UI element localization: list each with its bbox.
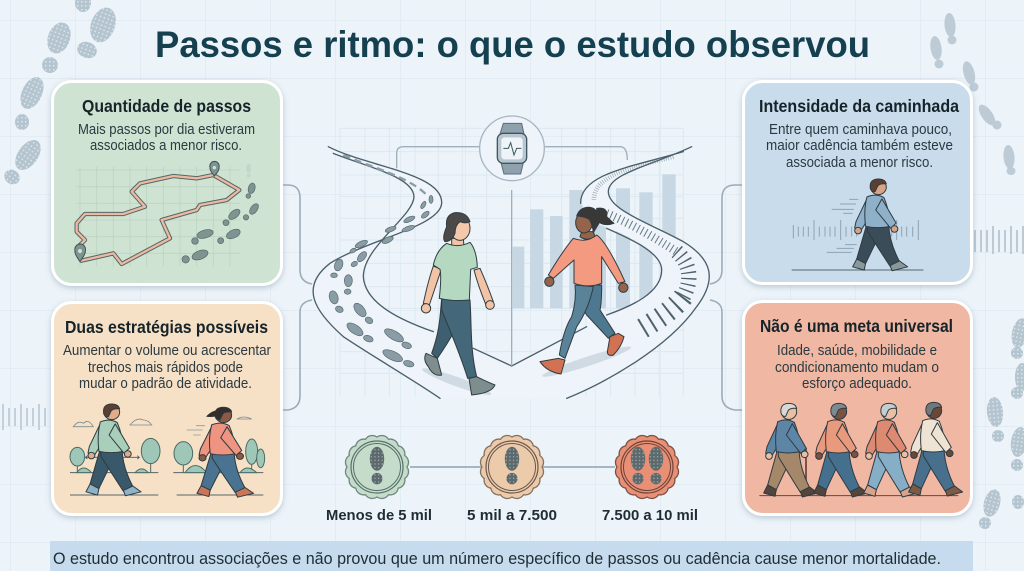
arrows xyxy=(85,456,139,459)
clouds xyxy=(73,417,252,427)
description xyxy=(766,121,953,171)
description: associados a menor risco. xyxy=(90,137,242,154)
heading: Duas estratégias possíveis xyxy=(65,317,268,337)
description xyxy=(63,342,271,392)
decorative ruler left xyxy=(3,404,45,430)
decorative footprints top right xyxy=(929,13,1016,175)
central illustration xyxy=(313,116,709,399)
decorative footprints lower right xyxy=(979,317,1024,529)
bottom disclaimer bar xyxy=(50,541,973,571)
description: maior cadência também esteve xyxy=(766,137,953,154)
footprints on road xyxy=(328,195,433,368)
cadence ticks xyxy=(594,157,689,330)
description xyxy=(775,342,939,392)
decorative footprints top left xyxy=(1,0,120,187)
walker 1 xyxy=(764,403,818,497)
heading: Quantidade de passos xyxy=(82,96,251,116)
side connectors xyxy=(282,185,742,410)
walker 2 xyxy=(814,403,868,497)
left road dashes xyxy=(343,155,428,197)
ground xyxy=(759,494,958,497)
medal connector line xyxy=(410,466,615,468)
panel: quantidade de passos xyxy=(52,82,282,284)
description: Aumentar o volume ou acrescentar xyxy=(63,342,271,359)
ground xyxy=(792,268,923,272)
medal: 7.500 a 10 mil xyxy=(615,435,679,499)
trees xyxy=(70,438,265,473)
description: trechos mais rápidos pode xyxy=(88,359,243,376)
heading: Não é uma meta universal xyxy=(760,316,953,336)
man xyxy=(86,404,141,496)
bottom disclaimer bar: O estudo encontrou associações e não provou que um número específico de passos ou cadência cause menor mortalidade. xyxy=(53,549,941,568)
description xyxy=(78,121,255,154)
walker 4 xyxy=(909,402,963,496)
panel: duas estratégias possíveis xyxy=(52,302,282,514)
watch icon xyxy=(480,116,544,181)
woman in green walking xyxy=(421,213,495,399)
motion lines xyxy=(187,426,205,435)
description: esforço adequado. xyxy=(802,375,912,392)
central divider xyxy=(510,190,514,366)
ponytail xyxy=(206,410,221,417)
description: mudar o padrão de atividade. xyxy=(79,375,252,392)
heading: Intensidade da caminhada xyxy=(759,96,959,116)
description: condicionamento mudam o xyxy=(775,359,939,376)
cane xyxy=(801,449,806,494)
medal labels: 5 mil a 7.500 xyxy=(467,507,557,524)
description: Idade, saúde, mobilidade e xyxy=(777,342,937,359)
walker 3 xyxy=(864,403,918,497)
central grid xyxy=(340,128,683,397)
four older walkers xyxy=(759,402,963,497)
medal labels: Menos de 5 mil xyxy=(326,507,432,524)
description: Entre quem caminhava pouco, xyxy=(769,121,952,138)
decorative ruler right xyxy=(975,226,1023,254)
medal labels: 7.500 a 10 mil xyxy=(602,507,698,524)
road edges xyxy=(313,147,709,398)
chart bars xyxy=(513,174,676,308)
panel: intensidade da caminhada xyxy=(744,82,972,284)
cadence ruler xyxy=(793,220,918,240)
walker xyxy=(853,179,908,271)
woman in coral walking xyxy=(540,207,632,381)
walkers with trees xyxy=(70,404,265,497)
description: associada a menor risco. xyxy=(786,154,933,171)
walker with cadence ruler xyxy=(792,179,923,271)
panel: não é uma meta universal xyxy=(744,302,972,514)
motion lines xyxy=(827,199,858,252)
woman xyxy=(197,407,254,497)
connector lines xyxy=(397,147,627,168)
road surface xyxy=(313,147,709,398)
route map xyxy=(75,161,260,267)
medal: 5 mil a 7.500 xyxy=(480,435,544,499)
medal: menos de 5 mil xyxy=(345,435,409,499)
ground lines xyxy=(70,473,263,495)
medal labels xyxy=(326,507,698,524)
title: Passos e ritmo: o que o estudo observou xyxy=(155,24,870,65)
description: Mais passos por dia estiveram xyxy=(78,121,255,138)
